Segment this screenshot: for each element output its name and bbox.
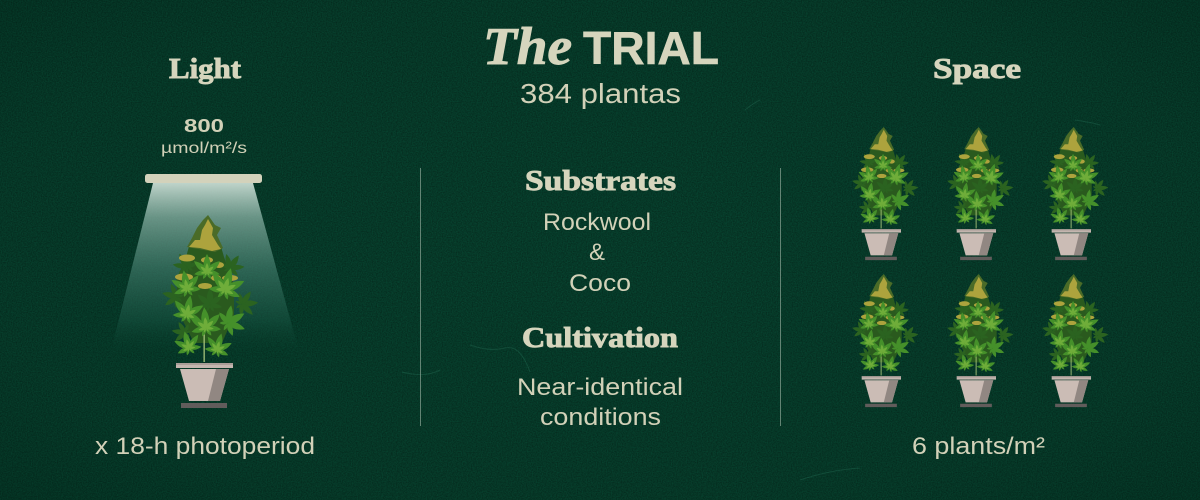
divider left	[420, 168, 421, 426]
substrate: Coco: Coco	[569, 270, 631, 297]
heading: Light: Light	[169, 53, 241, 85]
heading: Cultivation: Cultivation	[522, 322, 678, 354]
title	[483, 18, 719, 76]
light unit: µmol/m²/s	[161, 140, 247, 157]
cultivation line one: Near-identical	[517, 374, 683, 401]
heading: Space: Space	[933, 53, 1021, 85]
plant grid	[850, 127, 1109, 407]
title: TRIAL	[583, 22, 719, 74]
photoperiod label: x 18-h photoperiod	[95, 433, 315, 460]
divider right	[780, 168, 781, 426]
icon: large potted plant	[159, 215, 259, 408]
density label: 6 plants/m²	[912, 433, 1045, 460]
cultivation line two: conditions	[540, 404, 661, 431]
light beam	[110, 183, 300, 355]
panel: space	[850, 53, 1109, 460]
panel: cultivation	[517, 322, 683, 431]
ampersand: &	[589, 239, 605, 266]
panel: substrates	[525, 165, 676, 297]
panel: light	[95, 53, 315, 460]
light value: 800	[184, 116, 224, 136]
lamp	[145, 174, 262, 183]
title: The	[483, 18, 572, 76]
substrate: Rockwool: Rockwool	[543, 209, 651, 236]
subtitle: 384 plantas	[520, 78, 681, 109]
heading: Substrates: Substrates	[525, 165, 676, 197]
